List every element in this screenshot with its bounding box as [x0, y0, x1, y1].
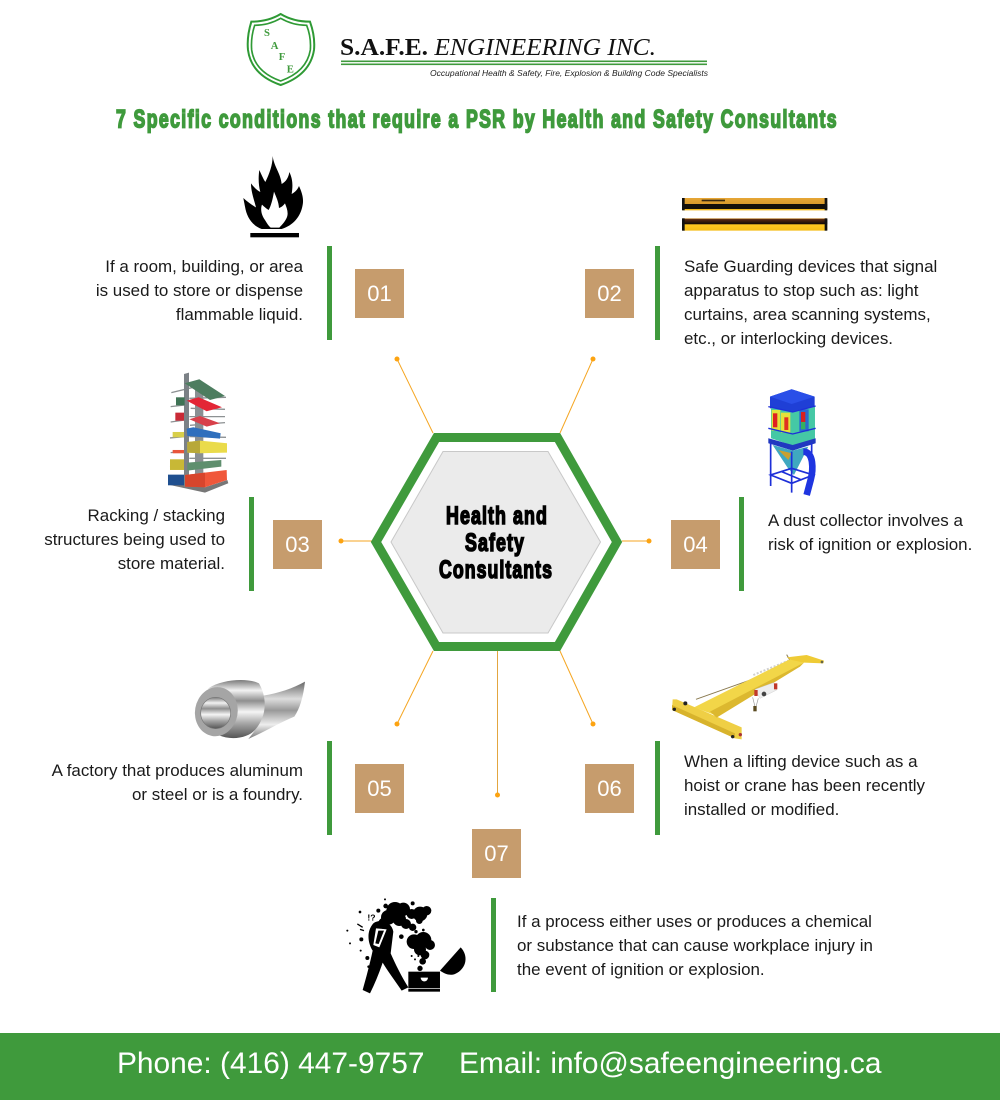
item 04 text [768, 511, 972, 554]
item 03 bar [249, 497, 254, 591]
item 03 text: structures being used to [44, 530, 225, 549]
item 06 text: hoist or crane has been recently [684, 776, 925, 795]
logo: green rules [341, 60, 707, 65]
logo: shield: A [271, 41, 279, 52]
item 07 text: If a process either uses or produces a chemical [517, 912, 872, 931]
item 01 number: 01 [367, 281, 392, 306]
connector lines [341, 359, 649, 795]
icon: aluminum coil [191, 680, 305, 740]
connector dots [338, 356, 652, 798]
item 03 text: Racking / stacking [88, 506, 225, 525]
item 02 text: curtains, area scanning systems, [684, 305, 931, 324]
item 02 text: Safe Guarding devices that signal [684, 257, 937, 276]
item 02 text [684, 257, 937, 348]
item 04 text: A dust collector involves a [768, 511, 963, 530]
logo: shield: F [279, 52, 285, 63]
logo: shield: S [264, 28, 270, 39]
item 04 number: 04 [683, 532, 708, 557]
item 05 number: 05 [367, 776, 392, 801]
central hexagon label: Health and [446, 502, 548, 530]
item 07 text: or substance that can cause workplace injury in [517, 936, 873, 955]
item 05 text [52, 761, 303, 804]
item 01 text: flammable liquid. [176, 305, 303, 324]
item 07 number: 07 [484, 841, 509, 866]
item 07 bar [491, 898, 496, 992]
central hexagon label [439, 502, 553, 584]
item 06 text [684, 752, 925, 819]
item 04 bar [739, 497, 744, 591]
central hexagon label: Safety [465, 529, 525, 557]
item 02 text: etc., or interlocking devices. [684, 329, 893, 348]
item 05 text: or steel or is a foundry. [132, 785, 303, 804]
item 07 text: the event of ignition or explosion. [517, 960, 765, 979]
icon: cantilever rack [168, 373, 228, 493]
item 06 number [585, 764, 634, 813]
central hexagon label: Consultants [439, 556, 553, 584]
item 06 text: When a lifting device such as a [684, 752, 918, 771]
item 01 number [355, 269, 404, 318]
item 05 text: A factory that produces aluminum [52, 761, 303, 780]
item 07 text [517, 912, 873, 979]
icon: flame [243, 156, 303, 237]
item 07 number [472, 829, 521, 878]
icon: chemical exposure figure: !? [367, 913, 376, 923]
icon: overhead crane [672, 655, 824, 739]
item 04 number [671, 520, 720, 569]
icon: dust collector [768, 389, 816, 495]
item 02 text: apparatus to stop such as: light [684, 281, 918, 300]
item 02 number: 02 [597, 281, 622, 306]
logo: shield [248, 14, 314, 85]
item 02 number [585, 269, 634, 318]
item 01 text: is used to store or dispense [96, 281, 303, 300]
icon: chemical exposure figure [346, 898, 466, 993]
item 01 text: If a room, building, or area [105, 257, 303, 276]
item 01 text [96, 257, 304, 324]
item 03 text [44, 506, 225, 573]
item 06 bar [655, 741, 660, 835]
contact footer: Phone: (416) 447-9757 [117, 1047, 424, 1080]
item 04 text: risk of ignition or explosion. [768, 535, 972, 554]
item 06 number: 06 [597, 776, 622, 801]
contact footer: Email: info@safeengineering.ca [459, 1047, 881, 1080]
central hexagon [376, 438, 617, 646]
icon: light curtains [682, 198, 827, 231]
item 05 number [355, 764, 404, 813]
logo: tagline: Occupational Health & Safety, Fire, Explosion & Building Code Specialists [430, 68, 709, 78]
contact footer [0, 1033, 1000, 1100]
item 03 number: 03 [285, 532, 310, 557]
item 03 text: store material. [118, 554, 225, 573]
item 03 number [273, 520, 322, 569]
item 06 text: installed or modified. [684, 800, 839, 819]
item 02 bar [655, 246, 660, 340]
item 05 bar [327, 741, 332, 835]
logo: company name: S.A.F.E. ENGINEERING INC. [340, 34, 656, 61]
logo: shield: E [287, 64, 294, 75]
item 01 bar [327, 246, 332, 340]
